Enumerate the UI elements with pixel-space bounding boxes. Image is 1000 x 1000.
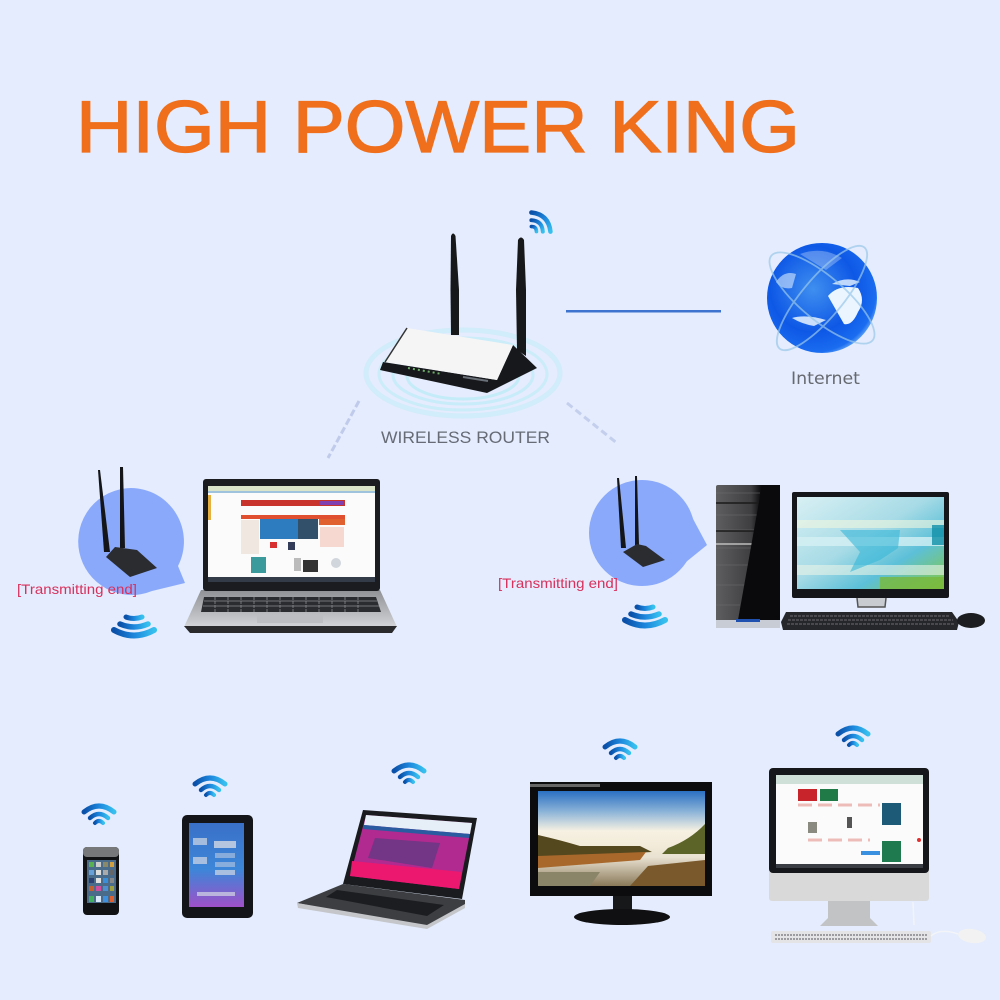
icon: wifi tv: [605, 741, 635, 758]
laptop base: [184, 590, 397, 627]
router body: [380, 345, 537, 393]
laptop base: [297, 884, 465, 928]
icon: wifi imac: [838, 728, 868, 745]
tower: [716, 485, 780, 628]
phone: [83, 847, 119, 915]
laptop: small: [297, 810, 477, 929]
laptop touchpad: [257, 615, 323, 623]
router logo: [463, 377, 488, 381]
icon: wifi right adapter: [625, 607, 665, 626]
imac computer: [769, 768, 987, 945]
imac stand: [820, 901, 878, 926]
router LEDs: [408, 368, 442, 374]
laptop screen: [208, 486, 375, 581]
imac display: [769, 768, 929, 873]
monitor screen: [797, 497, 944, 589]
orbits: [757, 235, 887, 361]
imac mouse: [957, 927, 987, 945]
continents: [776, 251, 862, 326]
desktop computer: [716, 485, 985, 630]
icon: wifi small laptop: [394, 765, 424, 782]
tv frame: [530, 782, 712, 896]
tv screen photo: [538, 791, 705, 886]
imac keyboard: [771, 931, 931, 943]
tv monitor: [530, 782, 712, 925]
keyboard: [781, 612, 959, 630]
laptop lid: [203, 479, 380, 591]
speech bubble: [589, 480, 695, 586]
tv stand: [613, 896, 632, 916]
imac cable: [913, 902, 958, 936]
wireless router label: WIRELESS ROUTER: [381, 429, 550, 447]
arrow: to laptop: [328, 401, 359, 458]
icon: wifi phone: [84, 806, 114, 823]
speech bubble: [78, 488, 185, 595]
adapter body: [106, 547, 157, 577]
adapter antennas: [98, 467, 125, 552]
tablet screen: [189, 823, 244, 907]
signal rings: [366, 330, 560, 416]
mouse: [957, 613, 985, 628]
router antennas: [450, 234, 526, 356]
adapter body: [623, 544, 665, 567]
imac screen: [776, 775, 923, 868]
icon: wifi tablet: [195, 778, 225, 795]
wireless router: [366, 234, 560, 416]
arrow: to desktop: [567, 403, 618, 444]
monitor stand: [857, 598, 886, 607]
transmitting end label left: [Transmitting end]: [17, 581, 137, 597]
icon: wifi router: [524, 209, 554, 239]
tablet: [182, 815, 253, 918]
laptop keyboard: [201, 597, 381, 612]
icon: internet globe: [757, 235, 887, 361]
internet label: Internet: [791, 369, 860, 389]
transmitting end label right: [Transmitting end]: [498, 575, 618, 591]
phone screen: [87, 860, 116, 903]
bubble and adapter left: [78, 467, 185, 595]
title: HIGH POWER KING: [76, 87, 800, 168]
imac chin: [769, 860, 929, 901]
web page: [208, 486, 375, 582]
laptop: large: [184, 479, 397, 633]
bubble and adapter right: [589, 476, 707, 586]
adapter antennas: [617, 476, 639, 548]
laptop screen: [350, 815, 472, 889]
monitor screen details: [797, 520, 944, 589]
laptop lid: [343, 810, 477, 899]
connection line: [566, 310, 721, 312]
laptop keyboard: [326, 890, 444, 916]
imac web page: [776, 775, 923, 868]
monitor frame: [792, 492, 949, 598]
icon: wifi left adapter: [114, 617, 154, 636]
